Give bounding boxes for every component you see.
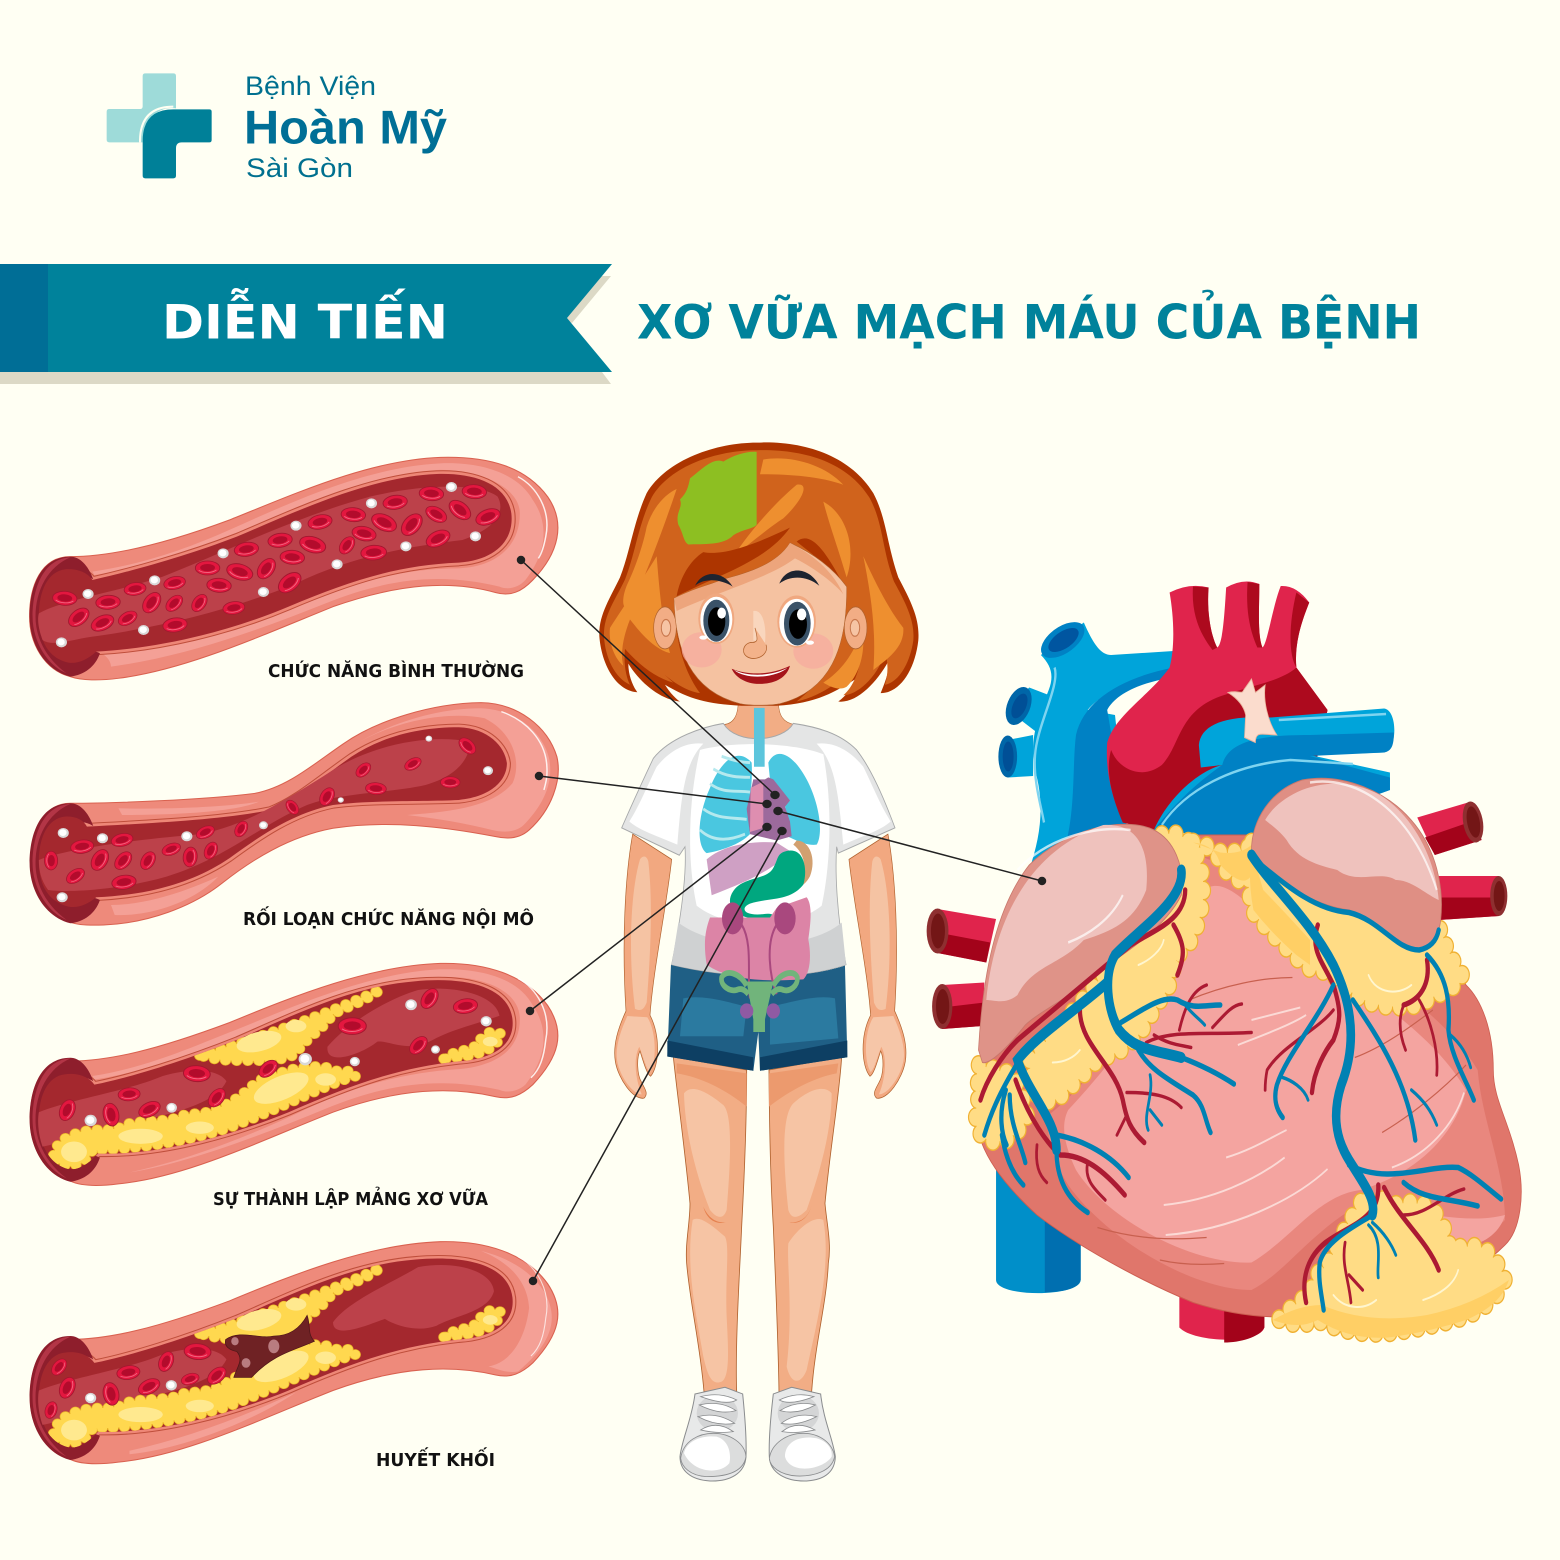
leader: plaque artery to heart bbox=[526, 824, 771, 1014]
kidneys and ureters bbox=[722, 902, 796, 998]
illustration: girl with organs bbox=[599, 442, 919, 1481]
heading: DIỄN TIẾN: DIỄN TIẾN bbox=[162, 288, 448, 350]
fat deposits bbox=[976, 834, 1509, 1338]
logo text: Bệnh Viện: Bệnh Viện bbox=[245, 71, 376, 101]
blood clot bbox=[225, 1315, 314, 1377]
leader: large heart to organ bbox=[774, 808, 1046, 884]
caption: RỐI LOẠN CHỨC NĂNG NỘI MÔ: RỐI LOẠN CHỨC NĂNG NỘI MÔ bbox=[243, 906, 534, 930]
red blood cells bbox=[44, 735, 479, 891]
organs bbox=[700, 708, 820, 1032]
heading: XƠ VỮA MẠCH MÁU CỦA BỆNH: XƠ VỮA MẠCH MÁU CỦA BỆNH bbox=[637, 290, 1421, 350]
mouth bbox=[732, 666, 790, 684]
illustration: human heart bbox=[927, 581, 1521, 1342]
girl upper body bbox=[599, 442, 919, 1098]
caption: CHỨC NĂNG BÌNH THƯỜNG: CHỨC NĂNG BÌNH THƯỜNG bbox=[268, 660, 524, 682]
white blood cells bbox=[85, 999, 492, 1126]
arms bbox=[615, 834, 906, 1098]
inferior vena cava bbox=[996, 1150, 1081, 1293]
red blood cells bbox=[43, 1343, 230, 1420]
panel: thrombus artery bbox=[30, 1242, 558, 1464]
uterus bbox=[721, 973, 797, 1032]
ears bbox=[654, 607, 867, 649]
right pulmonary vessels bbox=[1417, 798, 1507, 920]
eyes bbox=[698, 593, 816, 648]
right atrium bbox=[1252, 778, 1441, 950]
red coronary arteries bbox=[980, 890, 1464, 1302]
caption: HUYẾT KHỐI: HUYẾT KHỐI bbox=[376, 1447, 495, 1471]
face bbox=[674, 543, 847, 705]
red blood cells bbox=[52, 484, 503, 635]
heart organ bbox=[747, 777, 792, 840]
stomach bbox=[730, 850, 805, 919]
great veins and arteries behind the heart bbox=[927, 581, 1507, 1342]
logo text: Sài Gòn: Sài Gòn bbox=[246, 153, 353, 183]
superior vena cava bbox=[998, 615, 1174, 870]
plaque deposits bbox=[53, 1267, 501, 1444]
blue coronary veins bbox=[984, 855, 1501, 1310]
hair bbox=[599, 442, 919, 706]
shoes bbox=[680, 1387, 835, 1481]
panel: normal artery bbox=[30, 457, 558, 680]
icon: medical cross bbox=[107, 73, 212, 178]
left pulmonary vessels bbox=[927, 908, 996, 1029]
shorts bbox=[667, 965, 847, 1071]
leader lines bbox=[518, 556, 1046, 1284]
trachea bbox=[754, 708, 765, 767]
leader: dysfunction artery to heart bbox=[536, 772, 771, 808]
logo: Bệnh Viện Hoàn Mỹ Sài Gòn bbox=[107, 71, 447, 183]
white blood cells bbox=[85, 1380, 177, 1403]
lower aorta stub bbox=[1179, 1290, 1264, 1342]
pulmonary artery bbox=[1154, 708, 1394, 840]
leader: normal artery to heart bbox=[518, 556, 779, 798]
white blood cells bbox=[57, 736, 493, 902]
neck bbox=[722, 699, 795, 747]
white blood cells bbox=[56, 482, 481, 647]
t-shirt bbox=[622, 723, 895, 976]
spleen bbox=[793, 840, 813, 887]
caption: SỰ THÀNH LẬP MẢNG XƠ VỮA: SỰ THÀNH LẬP MẢNG XƠ VỮA bbox=[213, 1187, 488, 1210]
girl legs and shoes bbox=[673, 1057, 842, 1481]
lung right bbox=[768, 754, 820, 845]
heart muscle bbox=[977, 835, 1521, 1317]
intestines bbox=[705, 897, 811, 980]
liver bbox=[707, 842, 790, 895]
nose bbox=[744, 611, 767, 659]
lung and ribs left bbox=[700, 756, 752, 853]
aortic arch bbox=[1107, 581, 1328, 830]
leader: thrombus artery to heart bbox=[530, 828, 786, 1284]
plaque deposits bbox=[53, 989, 501, 1166]
ligament bbox=[1228, 679, 1277, 742]
red blood cells bbox=[56, 986, 479, 1127]
panel: plaque formation artery bbox=[30, 963, 558, 1185]
logo text: Hoàn Mỹ: Hoàn Mỹ bbox=[244, 100, 447, 154]
eyebrows bbox=[695, 570, 819, 587]
left atrium bbox=[978, 824, 1182, 1063]
panel: endothelial dysfunction artery bbox=[30, 703, 558, 925]
title banner bbox=[0, 264, 612, 384]
